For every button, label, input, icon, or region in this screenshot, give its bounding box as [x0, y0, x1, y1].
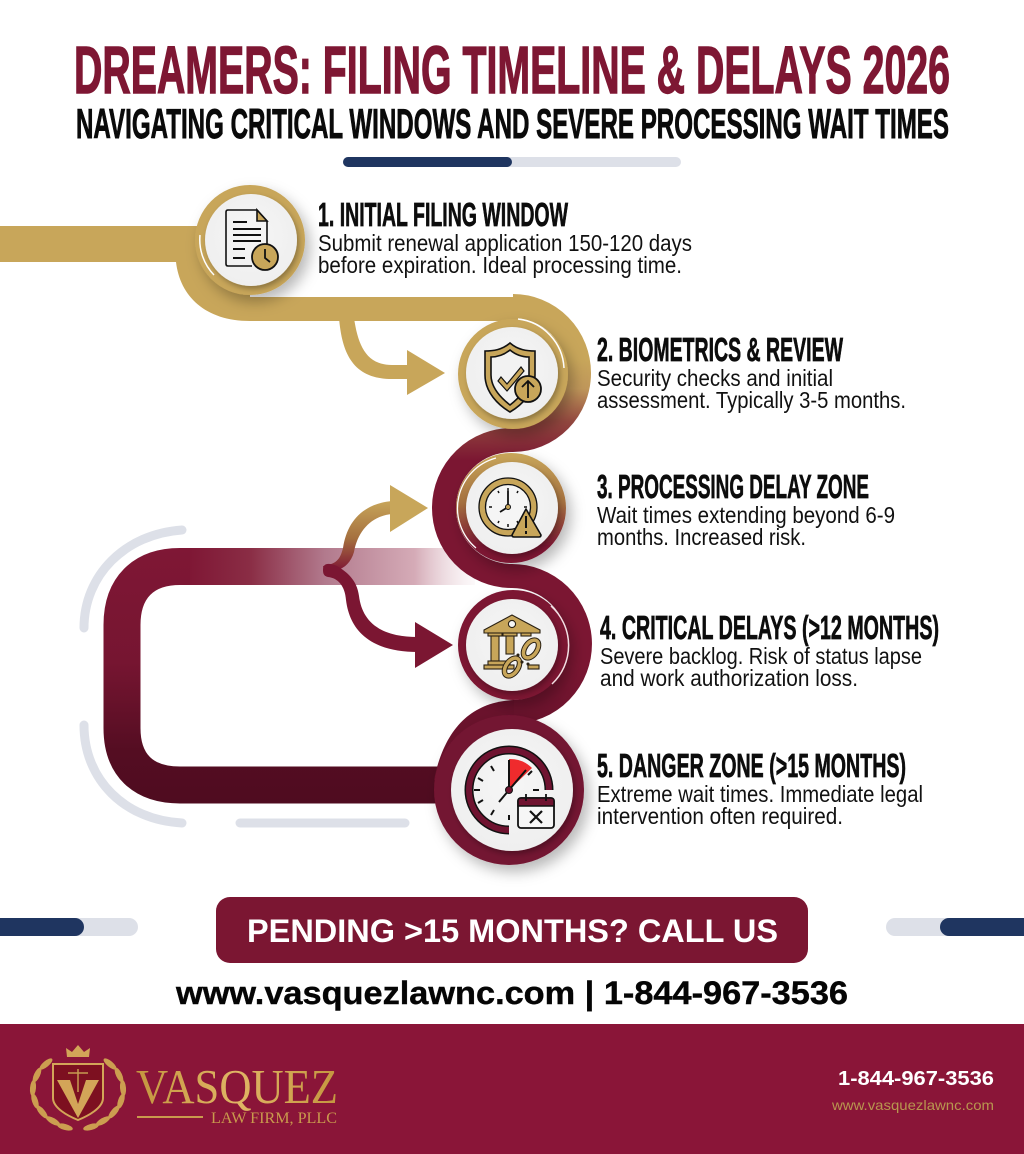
- step 4 badge: [458, 590, 569, 700]
- footer band: [0, 1024, 1024, 1154]
- call to action button: [216, 897, 808, 963]
- step 1 badge: [195, 185, 305, 295]
- step 1 text: before expiration. Ideal processing time.: [318, 252, 682, 278]
- arrow into step 2: [339, 318, 445, 395]
- step 4 text: and work authorization loss.: [600, 665, 858, 691]
- footer phone: 1-844-967-3536: [838, 1068, 994, 1090]
- footer website: www.vasquezlawnc.com: [831, 1097, 994, 1113]
- step 3 text: months. Increased risk.: [597, 524, 806, 550]
- step 2 text: assessment. Typically 3-5 months.: [597, 387, 906, 413]
- step 5 text: Extreme wait times. Immediate legal: [597, 781, 923, 807]
- step 2 text: 2. BIOMETRICS & REVIEW: [597, 331, 843, 368]
- step 2 text: [597, 331, 906, 413]
- step 5 text: intervention often required.: [597, 803, 843, 829]
- call to action button: PENDING >15 MONTHS? CALL US: [247, 913, 778, 949]
- step 2 badge: [458, 319, 568, 429]
- logo emblem: [29, 1045, 127, 1132]
- icon: overdue gauge with calendar: [469, 750, 554, 830]
- step 3 text: [597, 468, 895, 550]
- title divider bar: [343, 157, 681, 167]
- icon: document with clock: [226, 210, 278, 270]
- step 2 text: Security checks and initial: [597, 365, 833, 391]
- icon: courthouse with broken chain: [484, 615, 542, 679]
- grey decorative arcs around the return loop: [84, 530, 405, 823]
- step 3 text: Wait times extending beyond 6-9: [597, 502, 895, 528]
- step 1 text: 1. INITIAL FILING WINDOW: [318, 196, 568, 233]
- step 1 text: [318, 196, 692, 278]
- branch arrow into step 4: [323, 564, 453, 668]
- step 4 text: [600, 609, 939, 691]
- logo wordmark: VASQUEZ: [136, 1059, 338, 1114]
- laurel wreath: [29, 1057, 127, 1132]
- step 4 text: Severe backlog. Risk of status lapse: [600, 643, 922, 669]
- icon: clock with warning: [479, 478, 541, 537]
- step 5 badge: [434, 715, 584, 865]
- logo tagline: LAW FIRM, PLLC: [211, 1110, 337, 1127]
- left accent bar: [0, 918, 138, 936]
- logo rule: [137, 1116, 203, 1118]
- branch arrow into step 3: [323, 485, 428, 576]
- right accent bar: [886, 918, 1024, 936]
- step 5 text: [597, 747, 923, 829]
- return loop pathway: [122, 548, 475, 785]
- winding pathway from gold to maroon: [434, 306, 580, 780]
- gold filing pathway: [0, 226, 520, 321]
- step 3 badge: [456, 453, 566, 563]
- contact line: www.vasquezlawnc.com | 1-844-967-3536: [175, 975, 848, 1011]
- step 1 text: Submit renewal application 150-120 days: [318, 230, 692, 256]
- icon: shield with check: [485, 343, 541, 412]
